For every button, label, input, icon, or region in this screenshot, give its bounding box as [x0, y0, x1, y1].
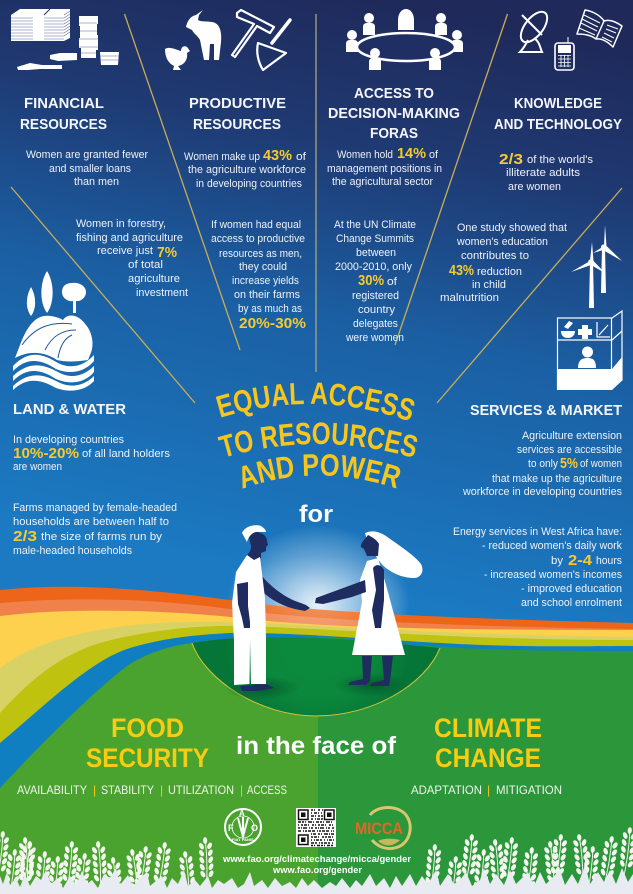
text: climate change dimensions	[411, 783, 562, 797]
text: loans: than men	[74, 176, 119, 188]
text: energy services: hours	[596, 555, 622, 567]
text: climate summits: registered	[352, 290, 399, 302]
icon: banknotes and coins	[11, 9, 119, 70]
text: land holders: of all land holders	[82, 448, 170, 460]
logo: MICCA: MICCA	[355, 819, 403, 838]
text: in the face of: in the face of	[236, 732, 397, 760]
text: investment: 7%	[157, 244, 177, 261]
panel: land and water	[13, 271, 177, 557]
text: energy services	[453, 526, 622, 609]
text: illiterate adults: are women	[508, 181, 561, 193]
text: yields: 20%-30%	[239, 315, 306, 332]
text: farm size	[13, 502, 177, 557]
heading: RESOURCES	[20, 116, 107, 133]
panel: knowledge and technology	[440, 7, 622, 308]
text: yields: increase yields	[232, 275, 299, 287]
icon: hammer	[232, 10, 274, 57]
text: investment	[76, 218, 188, 299]
icon: mobile phone	[555, 37, 574, 70]
title: AND POWER	[242, 454, 400, 489]
icon: goat	[186, 10, 221, 60]
text: workforce	[184, 147, 307, 190]
text: links	[222, 854, 411, 876]
text: climate change dimensions: MITIGATION	[496, 783, 562, 797]
text: land holders: In developing countries	[13, 434, 124, 446]
green ground	[0, 637, 633, 894]
text: illiterate adults: 2/3	[499, 151, 523, 168]
text: energy services: - improved education	[521, 583, 622, 595]
text: food security dimensions: |	[160, 783, 163, 797]
text: yields: they could	[239, 261, 287, 273]
text: energy services: 2-4	[568, 552, 593, 569]
text: climate summits: between	[356, 247, 396, 259]
QR code	[296, 808, 336, 847]
illustration: man and woman shaking hands	[224, 525, 422, 700]
title: EQUAL ACCESS	[216, 382, 414, 420]
heading: FINANCIAL	[24, 95, 104, 112]
title	[216, 382, 418, 489]
text: links: www.fao.org/gender	[272, 865, 362, 876]
text: energy services: by	[551, 555, 564, 567]
text: loans: Women are granted fewer	[26, 149, 148, 161]
text: farm size: 2/3	[13, 528, 37, 545]
text: investment: receive just	[97, 245, 153, 257]
text: extension services	[462, 430, 622, 498]
text: education study: 43%	[449, 262, 474, 279]
text: energy services: - increased women's incomes	[484, 569, 622, 581]
text: climate summits: were women	[345, 332, 404, 344]
heading: KNOWLEDGE	[514, 95, 602, 112]
logo: MICCA	[355, 808, 410, 849]
text: farm size: Farms managed by female-headed	[13, 502, 177, 514]
heading: AND TECHNOLOGY	[494, 116, 622, 133]
heading: SERVICES & MARKET	[470, 402, 622, 419]
text: education study: in child	[472, 279, 506, 291]
text: management: Women hold	[337, 149, 393, 161]
text: workforce: Women make up	[184, 151, 260, 163]
logo: FAO: A	[239, 809, 245, 818]
icon: open book	[577, 10, 622, 47]
text: climate summits: delegates	[353, 318, 398, 330]
woman	[315, 531, 422, 686]
text: extension services: 5%	[560, 455, 578, 472]
text: illiterate adults: illiterate adults	[506, 167, 581, 179]
text: climate summits: country	[358, 304, 396, 316]
text: food security dimensions: ACCESS	[247, 783, 287, 797]
text: extension services: of women	[580, 458, 622, 470]
text: land holders: 10%-20%	[13, 445, 79, 462]
text: climate summits: 2000-2010, only	[335, 261, 412, 273]
heading	[20, 95, 107, 133]
text: food security dimensions: |	[93, 783, 96, 797]
text: energy services: - reduced women's daily work	[482, 540, 622, 552]
text: workforce: the agriculture workforce	[188, 164, 306, 176]
text: land holders: are women	[13, 461, 62, 473]
text: management: 14%	[397, 145, 426, 162]
panel: services and market	[453, 311, 622, 609]
text: education study: contributes to	[461, 250, 529, 262]
text: extension services: to only	[528, 458, 558, 470]
text: yields: resources as men,	[219, 248, 302, 260]
text: climate summits: At the UN Climate	[334, 219, 416, 231]
rainbow bands	[0, 555, 633, 894]
text: extension services: that make up the agriculture	[492, 473, 622, 485]
text: workforce: of	[296, 151, 307, 163]
text: investment: of total	[128, 259, 163, 271]
text: climate change dimensions: ADAPTATION	[411, 783, 482, 797]
text: yields: access to productive	[211, 233, 305, 245]
text: illiterate adults	[499, 151, 594, 193]
text: workforce: in developing countries	[196, 178, 302, 190]
text: education study	[440, 222, 567, 304]
text: climate summits: of	[387, 276, 398, 288]
heading: LAND & WATER	[13, 401, 126, 418]
text: investment: agriculture	[128, 273, 180, 285]
text: education study: women's education	[456, 236, 548, 248]
text: management: of	[429, 149, 439, 161]
heading: climate change: CLIMATE	[434, 713, 542, 743]
text: education study: One study showed that	[457, 222, 567, 234]
text: education study: malnutrition	[440, 292, 499, 304]
text: yields: If women had equal	[211, 219, 301, 231]
text: food security dimensions	[17, 783, 287, 797]
logo: FAO: FIAT PANIS	[232, 837, 254, 842]
icon: meeting table	[346, 9, 463, 70]
text: yields: on their farms	[234, 289, 300, 301]
heading: PRODUCTIVE	[189, 95, 286, 112]
icon: wind turbines	[571, 225, 622, 308]
text: workforce: 43%	[263, 147, 292, 164]
panel: access to decision-making foras	[327, 9, 463, 344]
text: climate summits: Change Summits	[336, 233, 414, 245]
title: TO RESOURCES	[218, 422, 418, 457]
text: loans: and smaller loans	[49, 163, 131, 175]
heading: climate change: CHANGE	[435, 743, 541, 773]
text: food security dimensions: STABILITY	[101, 783, 154, 797]
text: investment: fishing and agriculture	[76, 232, 183, 244]
text: loans	[26, 149, 148, 188]
text: for: for	[299, 501, 333, 528]
text: links: www.fao.org/climatechange/micca/gender	[222, 854, 411, 865]
text: management: management positions in	[327, 163, 442, 175]
text: education study: reduction	[477, 266, 522, 278]
text: yields	[211, 219, 306, 332]
text: food security dimensions: AVAILABILITY	[17, 783, 87, 797]
heading: ACCESS TO	[354, 85, 434, 102]
text: extension services: Agriculture extension	[522, 430, 622, 442]
text: illiterate adults: of the world's	[527, 154, 594, 166]
heading: RESOURCES	[193, 116, 281, 133]
text: food security dimensions: |	[240, 783, 243, 797]
logo: FAO: F	[228, 823, 234, 833]
heading	[494, 95, 622, 133]
text: climate change dimensions: |	[487, 783, 490, 797]
text: farm size: the size of farms run by	[41, 531, 163, 543]
heading: DECISION-MAKING	[328, 105, 460, 122]
divider lines	[11, 14, 622, 403]
heading: climate change	[434, 713, 542, 773]
text: management	[327, 145, 442, 188]
text: energy services: and school enrolment	[521, 597, 622, 609]
panel: financial resources	[11, 9, 188, 299]
man	[232, 525, 310, 691]
heading: FORAS	[370, 125, 418, 142]
text: investment: Women in forestry,	[76, 218, 166, 230]
text: farm size: households are between half to	[13, 516, 169, 528]
text: investment: investment	[136, 287, 188, 299]
text: food security dimensions: UTILIZATION	[168, 783, 234, 797]
icon: market kiosk	[557, 311, 622, 390]
heading	[189, 95, 286, 133]
heading: food security: SECURITY	[86, 743, 209, 773]
icon: chicken	[165, 46, 190, 70]
logo: FAO	[225, 809, 261, 845]
text: management: the agricultural sector	[332, 176, 433, 188]
panel: productive resources	[165, 10, 307, 332]
icon: satellite dish	[516, 7, 552, 52]
text: climate summits: 30%	[358, 272, 384, 289]
heading: food security: FOOD	[111, 713, 184, 743]
text: extension services: workforce in developing countries	[462, 486, 622, 498]
heading: food security	[86, 713, 209, 773]
logo: FAO: O	[251, 823, 258, 833]
text: extension services: services are accessible	[517, 444, 622, 456]
light glow behind figures	[226, 525, 410, 685]
icon: land and water	[13, 271, 94, 391]
heading	[328, 85, 460, 142]
text: land holders	[13, 434, 170, 473]
text: yields: by as much as	[238, 303, 302, 315]
wheat and grass border	[0, 826, 633, 894]
text: energy services: Energy services in West Africa have:	[453, 526, 622, 538]
text: farm size: male-headed households	[13, 545, 132, 557]
text: climate summits	[334, 219, 416, 344]
icon: trowel	[257, 20, 290, 70]
